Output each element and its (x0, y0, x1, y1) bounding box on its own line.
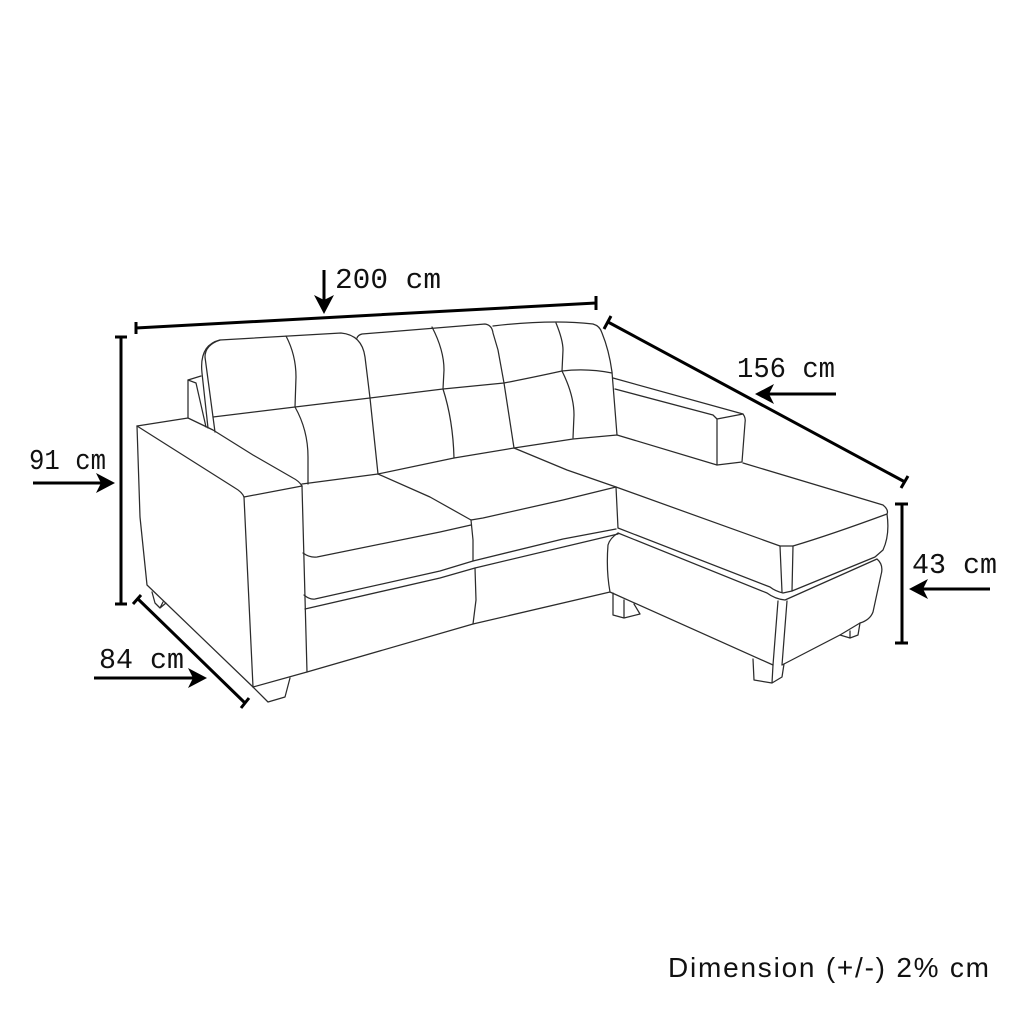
dimension: seat height 43 cm (895, 504, 997, 643)
dimension: depth 84 cm: 84 cm (99, 644, 184, 677)
dimension: height 91 cm: 91 cm (29, 445, 106, 478)
tolerance note: Dimension (+/-) 2% cm (668, 952, 989, 983)
chaise legs (613, 593, 860, 683)
dimension: height 91 cm (29, 337, 127, 604)
left armrest (137, 376, 307, 687)
seat cushions (303, 474, 618, 672)
dimension: width 200 cm: 200 cm (335, 264, 441, 297)
dimension: chaise length 156 cm: 156 cm (737, 353, 835, 386)
left arm legs (152, 592, 290, 702)
dimension: depth 84 cm (94, 595, 249, 708)
dimension: width 200 cm (136, 264, 596, 334)
sofa line drawing (137, 322, 888, 702)
dimension: seat height 43 cm: 43 cm (912, 549, 997, 582)
dimension: chaise length 156 cm (604, 316, 908, 488)
chaise lounge (514, 448, 888, 665)
back cushions (202, 322, 617, 484)
right side back armrest (613, 378, 745, 465)
